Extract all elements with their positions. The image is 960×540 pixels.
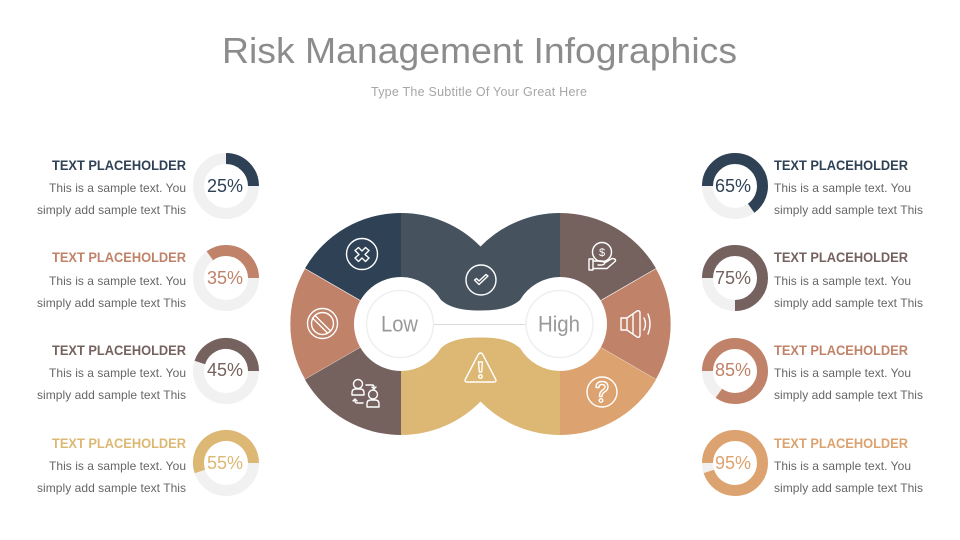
right item 2: simply add sample text This	[774, 296, 923, 310]
left item 4	[37, 428, 261, 498]
right item 2: This is a sample text. You	[774, 274, 911, 288]
right item 1: This is a sample text. You	[774, 181, 911, 195]
icon: ban	[308, 308, 338, 338]
left item 3	[37, 336, 261, 406]
segment: mauve right	[560, 213, 656, 324]
left item 2: This is a sample text. You	[49, 274, 186, 288]
right item 4	[708, 436, 923, 495]
left item 4: 55%	[207, 453, 243, 473]
icon: question	[587, 377, 617, 407]
right item 1: TEXT PLACEHOLDER	[774, 158, 908, 173]
icon: x in circle	[346, 238, 378, 270]
low circle	[366, 290, 434, 358]
high circle	[526, 290, 593, 358]
left item 3: This is a sample text. You	[49, 366, 186, 380]
low circle: Low	[381, 312, 418, 336]
right item 3: simply add sample text This	[774, 388, 923, 402]
left item 3: 45%	[207, 360, 243, 380]
right item 2: TEXT PLACEHOLDER	[774, 250, 908, 265]
left item 4: simply add sample text This	[37, 481, 186, 495]
segment: peach right	[560, 324, 656, 435]
high circle: High	[538, 312, 580, 336]
right item 3	[708, 343, 923, 402]
segment: orange left	[290, 268, 401, 380]
right item 3: 85%	[715, 360, 751, 380]
right item 4: 95%	[715, 453, 751, 473]
left item 1: 25%	[207, 176, 243, 196]
title: Risk Management Infographics	[222, 30, 737, 71]
right item 1: 65%	[715, 176, 751, 196]
right item 1: simply add sample text This	[774, 203, 923, 217]
right item 4: TEXT PLACEHOLDER	[774, 436, 908, 451]
right item 4: This is a sample text. You	[774, 459, 911, 473]
left item 2	[37, 240, 264, 316]
subtitle: Type The Subtitle Of Your Great Here	[371, 85, 587, 99]
right item 1	[708, 158, 923, 217]
segment: slate top	[401, 213, 560, 324]
left item 3: simply add sample text This	[37, 388, 186, 402]
right item 4: simply add sample text This	[774, 481, 923, 495]
segment: navy	[305, 213, 401, 324]
icon: check in circle	[466, 265, 496, 295]
segment: orange right	[560, 268, 671, 380]
right item 2: 75%	[715, 268, 751, 288]
left item 1: simply add sample text This	[37, 203, 186, 217]
right item 3: TEXT PLACEHOLDER	[774, 343, 908, 358]
segment: yellow bottom	[401, 324, 560, 435]
icon: warning	[465, 353, 496, 382]
left item 3: TEXT PLACEHOLDER	[52, 343, 186, 358]
left item 1: This is a sample text. You	[49, 181, 186, 195]
icon: people exchange	[352, 380, 379, 407]
white centre shape	[354, 277, 607, 371]
left item 4: TEXT PLACEHOLDER	[52, 436, 186, 451]
right item 3: This is a sample text. You	[774, 366, 911, 380]
left item 2: TEXT PLACEHOLDER	[52, 250, 186, 265]
right item 2	[708, 250, 923, 310]
left item 1: TEXT PLACEHOLDER	[52, 158, 186, 173]
icon: speaker	[621, 311, 650, 337]
left item 1	[37, 158, 254, 217]
left item 4: This is a sample text. You	[49, 459, 186, 473]
left item 2: 35%	[207, 268, 243, 288]
icon: hand holding coin	[589, 242, 616, 270]
left item 2: simply add sample text This	[37, 296, 186, 310]
segment: mauve left	[305, 324, 401, 435]
icon: hand holding coin: $	[599, 247, 605, 259]
central diagram	[290, 213, 671, 435]
